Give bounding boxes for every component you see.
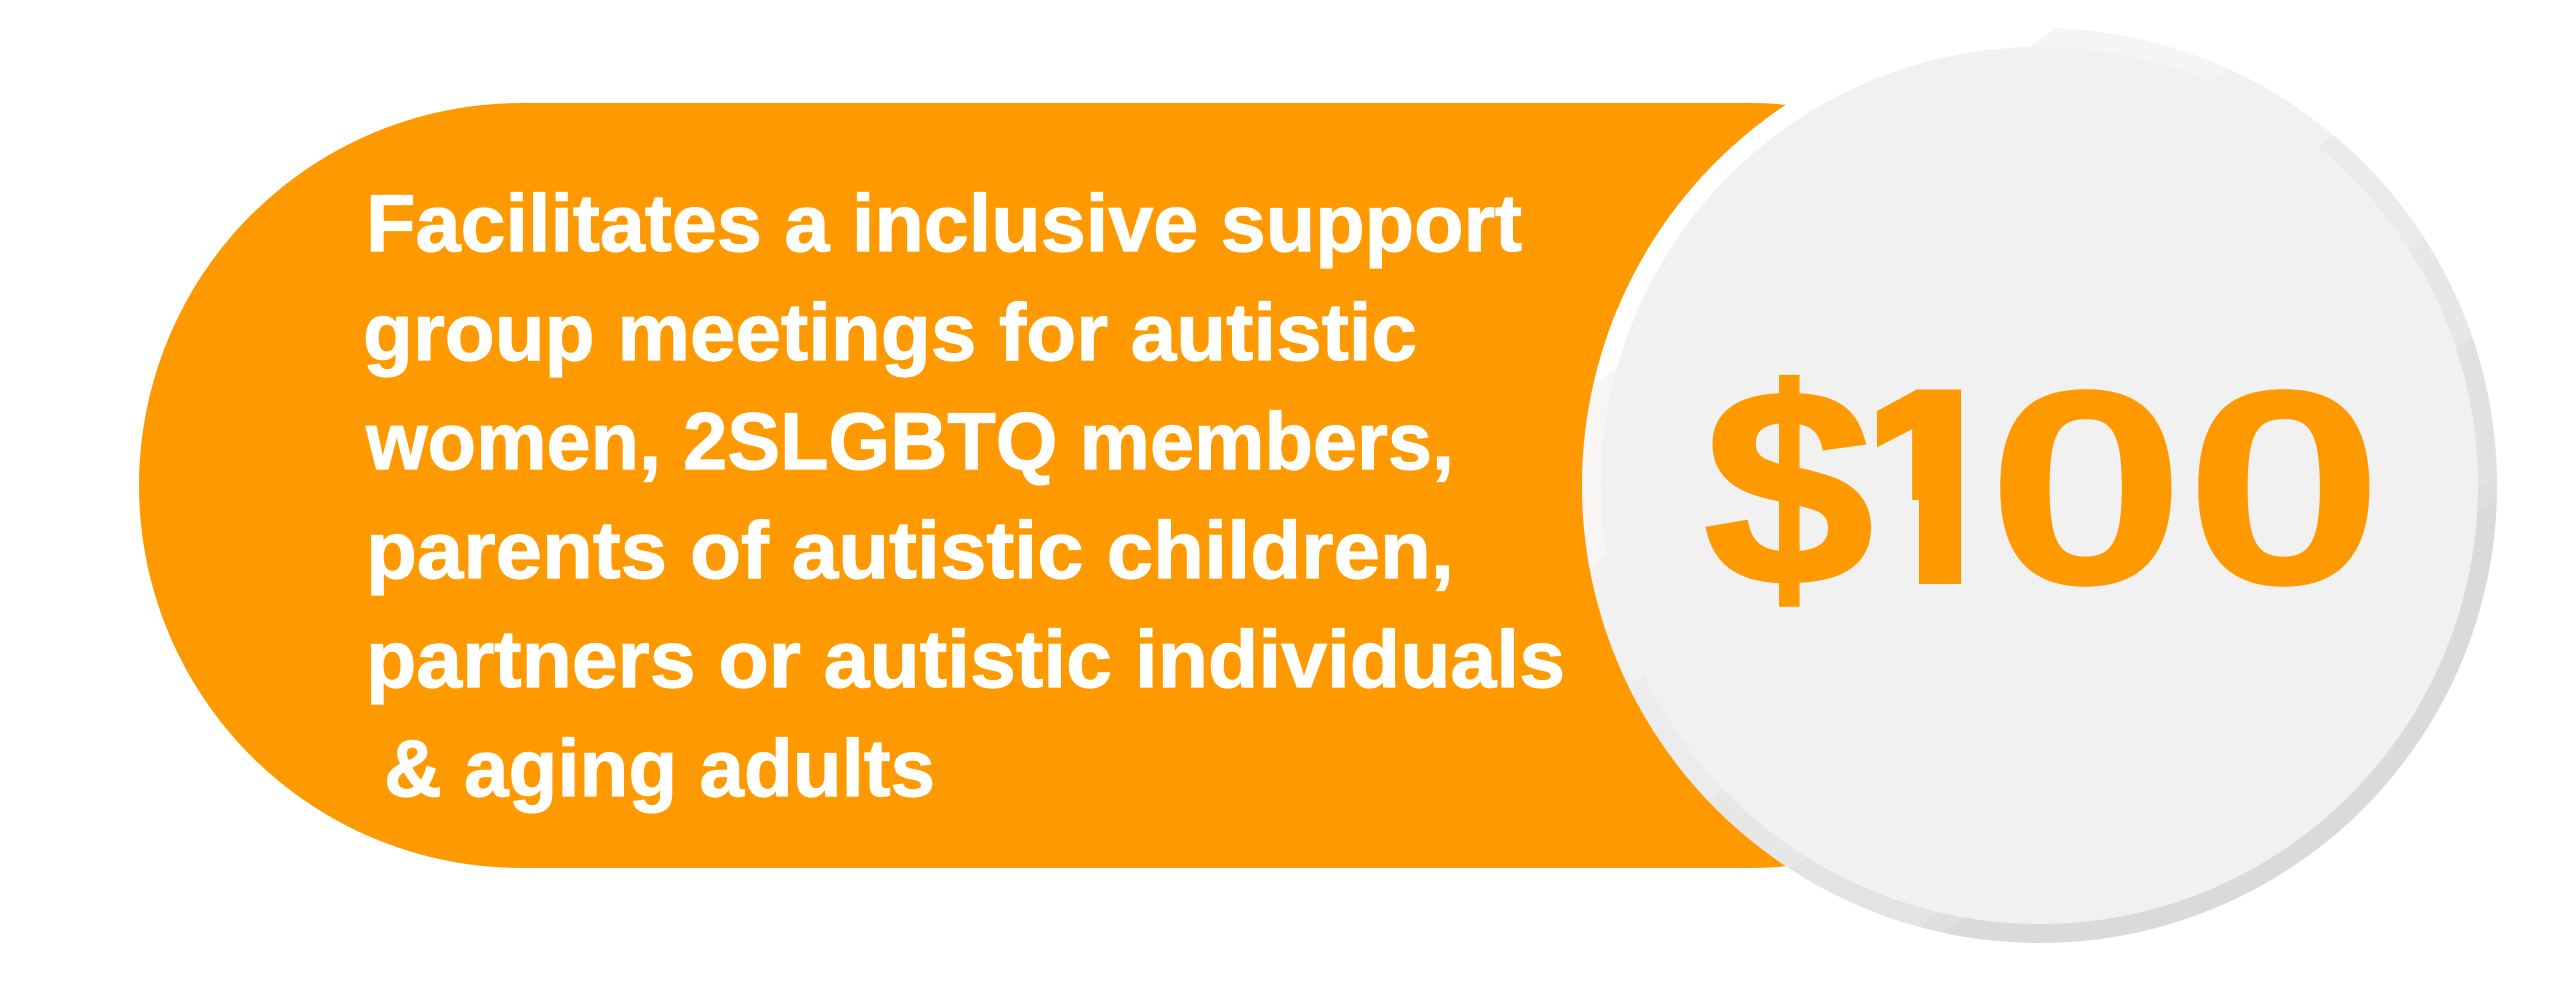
text block: description: group meetings for autistic	[363, 288, 1417, 378]
price: $100: 1	[1837, 332, 2023, 644]
text block: description: & aging adults	[384, 724, 935, 814]
price: $100: 0	[2184, 333, 2384, 644]
panel: orange pill	[139, 103, 2132, 868]
text block: description	[363, 179, 1565, 814]
text block: description: partners or autistic individuals	[366, 615, 1565, 705]
price: $100: 0	[1986, 333, 2186, 644]
text block: description: Facilitates a inclusive support	[366, 179, 1522, 269]
text block: description: women, 2SLGBTQ members,	[365, 397, 1454, 487]
text block: description: parents of autistic children,	[366, 506, 1454, 596]
price: $100: $	[1704, 332, 1873, 643]
panel: price badge	[1582, 28, 2497, 943]
price: $100	[1706, 374, 2370, 607]
